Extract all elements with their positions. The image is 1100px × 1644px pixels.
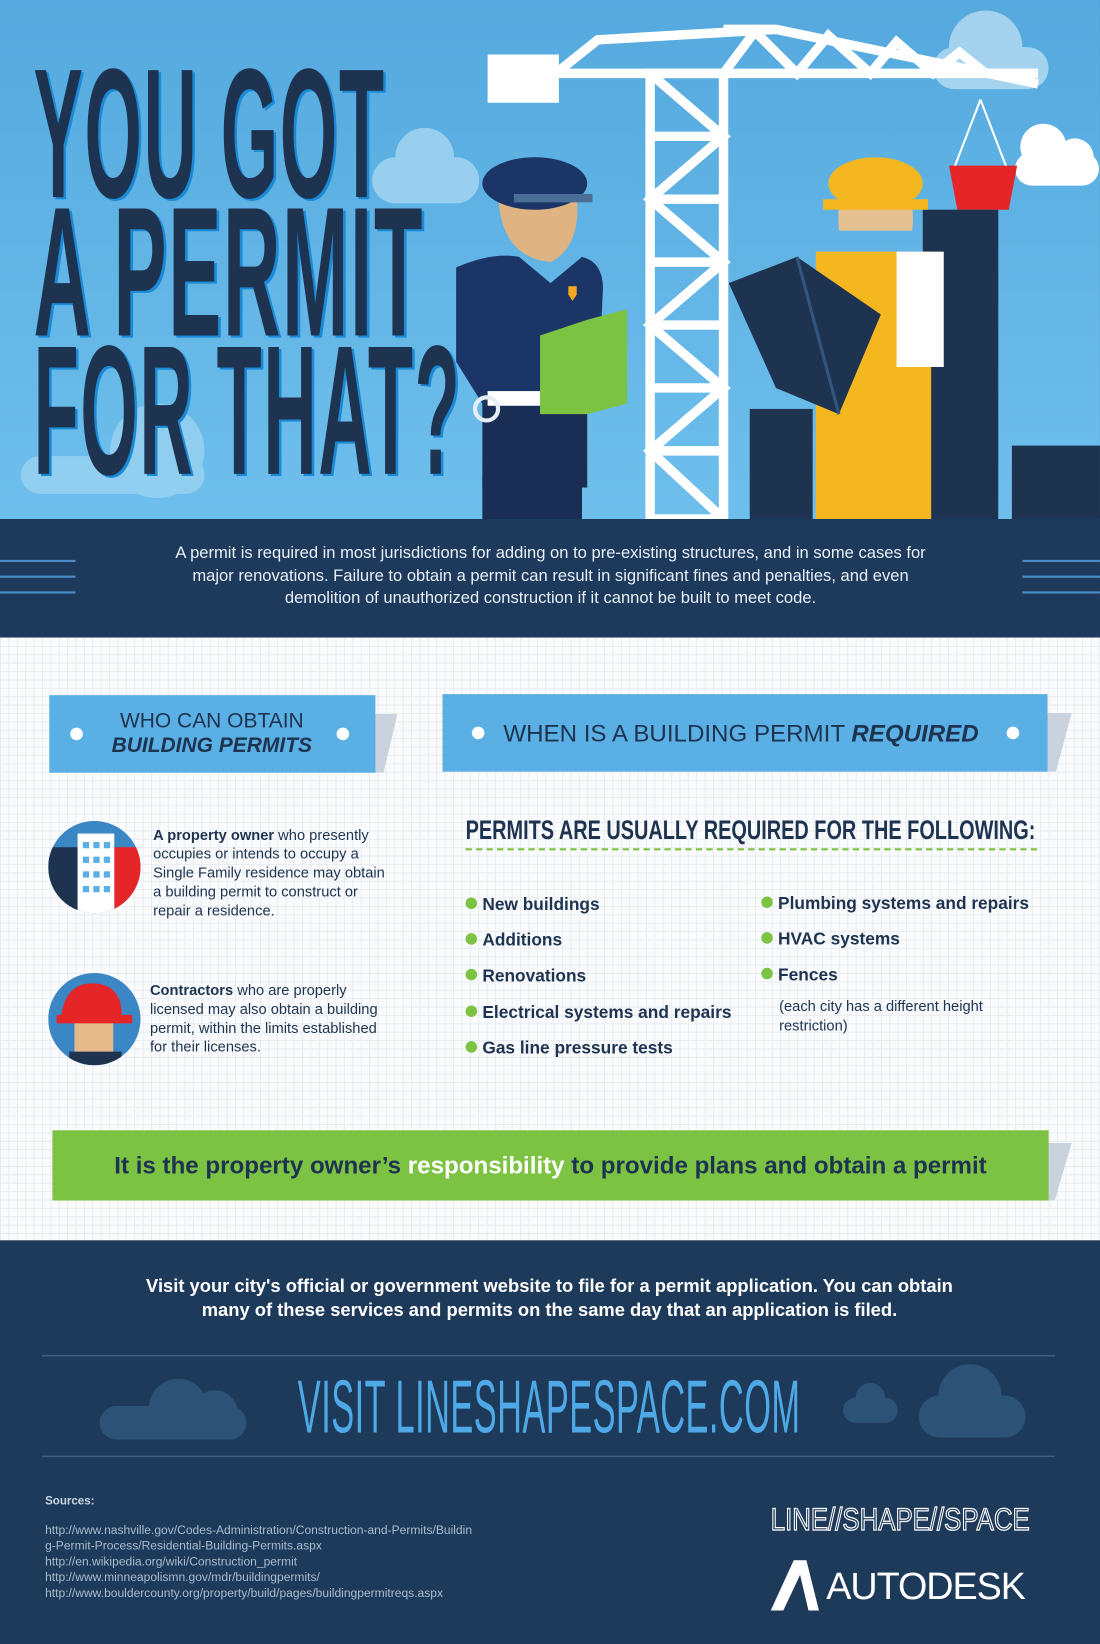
list: permits: Electrical systems and repairs	[482, 1003, 731, 1022]
heading: when required	[442, 694, 1072, 772]
hero panel: A PERMIT	[34, 170, 424, 375]
subheading: permits required: PERMITS ARE USUALLY REQUIRED FOR THE FOLLOWING:	[466, 814, 1035, 845]
crane	[488, 24, 1100, 519]
hero panel: YOU GOT	[34, 31, 386, 237]
background clouds	[21, 10, 1099, 498]
icon: building	[48, 821, 140, 914]
title	[34, 31, 461, 514]
footer	[0, 1240, 1100, 1644]
list: permits: Renovations	[482, 967, 586, 986]
callout: responsibility: It is the property owner’s responsibility to provide plans and obtain a permit	[114, 1151, 987, 1179]
callout: responsibility	[52, 1130, 1072, 1201]
list: permits: (each city has a different height	[779, 997, 983, 1014]
list: permits	[466, 894, 1029, 1058]
list: permits: Plumbing systems and repairs	[778, 894, 1029, 913]
heading: when required: WHEN IS A BUILDING PERMIT REQUIRED	[503, 719, 979, 747]
logo: autodesk: AUTODESK	[826, 1564, 1025, 1607]
list: permits: restriction)	[779, 1017, 848, 1034]
sources: http://www.bouldercounty.org/property/build/pages/buildingpermitreqs.aspx	[45, 1587, 443, 1600]
middle section	[0, 637, 1100, 1240]
footer text: Visit your city's official or government website to file for a permit application. You can obtain many of these services and permits on the same day that an application is filed.	[146, 1275, 953, 1320]
list: permits: Gas line pressure tests	[482, 1039, 673, 1058]
text: property owner: A property owner who presently occupies or intends to occupy a Single Family residence may obtain a building permit to construct or repair a residence.	[153, 826, 385, 918]
sources: g-Permit-Process/Residential-Building-Permits.aspx	[45, 1540, 322, 1553]
list: permits: Additions	[482, 931, 562, 950]
hero panel	[0, 0, 1100, 519]
heading: who can obtain: WHO CAN OBTAIN	[120, 710, 304, 733]
intro band	[0, 519, 1100, 637]
icon: contractor	[48, 973, 140, 1066]
text: contractors: Contractors who are properly licensed may also obtain a building permit, within the limits established for their licenses.	[150, 981, 378, 1055]
sources: http://www.minneapolismn.gov/mdr/buildingpermits/	[45, 1572, 320, 1584]
sources	[45, 1495, 472, 1600]
logo: line shape space: LINE//SHAPE//SPACE	[771, 1503, 1030, 1537]
visit url: VISIT LINESHAPESPACE.COM	[298, 1365, 801, 1449]
hero panel: FOR THAT?	[34, 308, 461, 514]
sources: http://en.wikipedia.org/wiki/Construction_permit	[45, 1556, 297, 1569]
sources: Sources:	[45, 1495, 94, 1508]
icon: inspector character	[456, 157, 628, 519]
sources: http://www.nashville.gov/Codes-Administration/Construction-and-Permits/Buildin	[45, 1525, 472, 1537]
list: permits: HVAC systems	[778, 930, 900, 949]
heading: who can obtain	[49, 695, 398, 773]
list: permits: Fences	[778, 966, 838, 985]
logo: autodesk	[770, 1560, 1026, 1610]
background building	[923, 210, 998, 519]
heading: who can obtain: BUILDING PERMITS	[112, 734, 312, 757]
icon: worker character	[728, 157, 944, 519]
intro text: A permit is required in most jurisdictions for adding on to pre-existing structures, and in some cases for major renovations. Failure to obtain a permit can result in significant fines and penalties, and even demolition of unauthorized construction if it cannot be built to meet code.	[175, 544, 926, 607]
list: permits: New buildings	[482, 895, 600, 914]
